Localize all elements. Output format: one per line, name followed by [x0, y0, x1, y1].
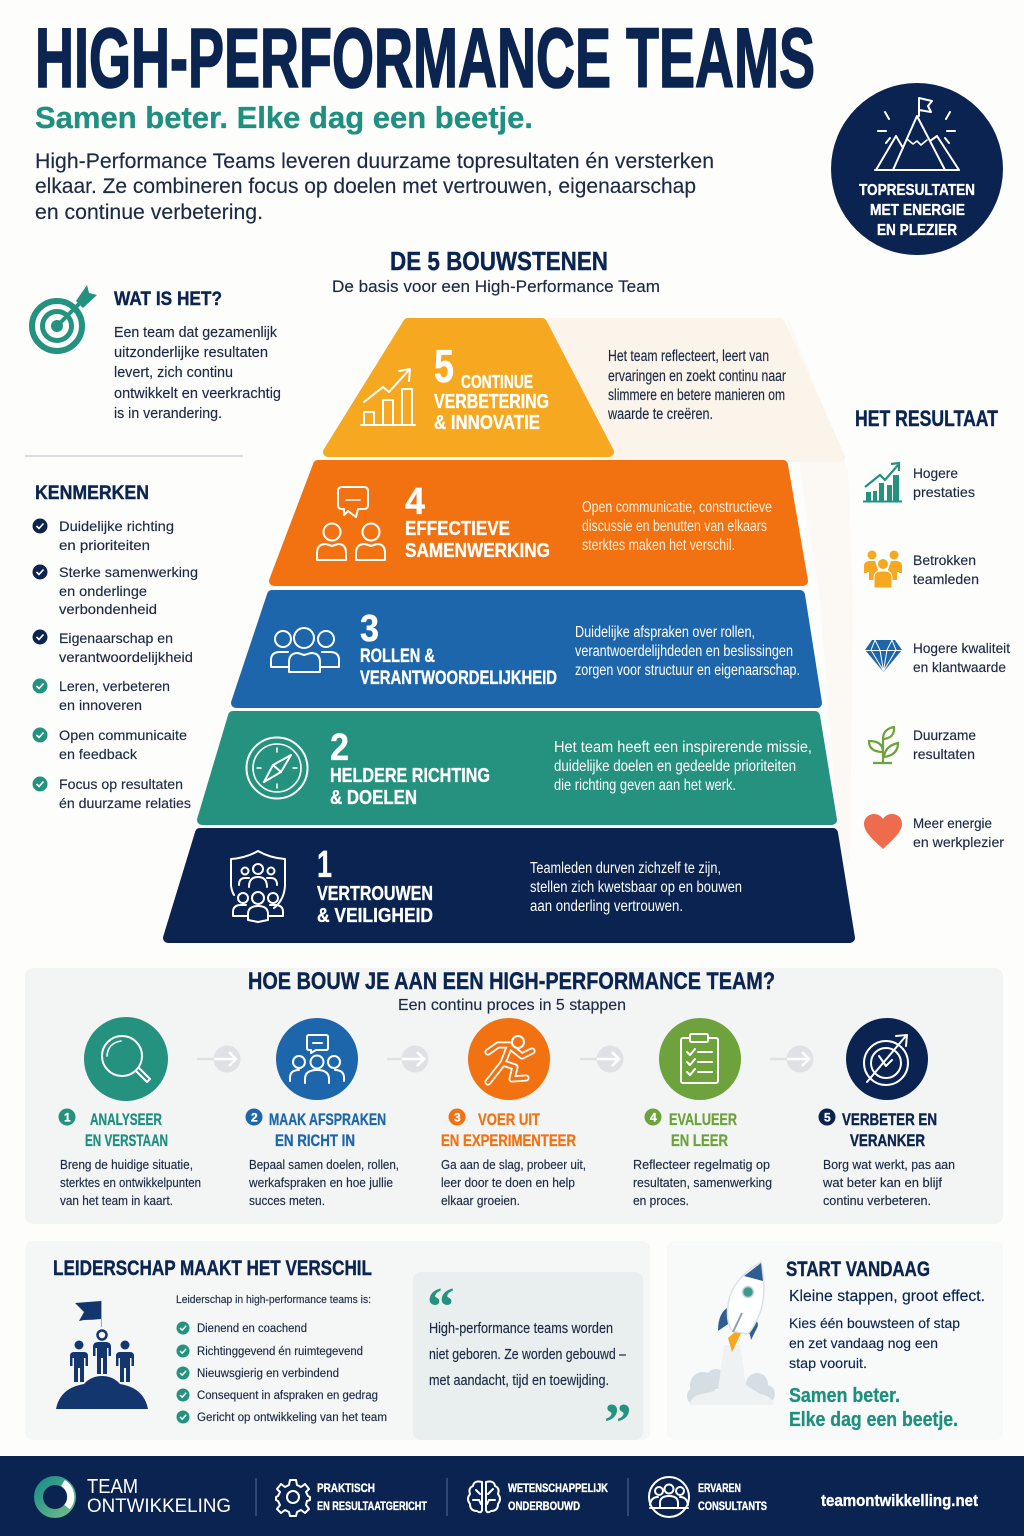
icon: rocket — [687, 1262, 775, 1405]
step 1: analyseer: van het team in kaart. — [60, 1194, 173, 1208]
icon: team of three — [271, 628, 339, 672]
panel: start vandaag: Kleine stappen, groot effect. — [789, 1288, 985, 1305]
panel: kenmerken: en onderlinge — [59, 583, 147, 599]
panel: het resultaat: resultaten — [913, 746, 975, 762]
icon: leader with team on hill — [56, 1301, 148, 1409]
icon: target — [32, 285, 97, 351]
panel: start vandaag: stap vooruit. — [789, 1355, 867, 1371]
panel: start vandaag — [667, 1241, 1003, 1440]
step 3: voer uit: 3 — [454, 1110, 461, 1124]
panel: het resultaat: Betrokken — [913, 552, 976, 568]
layer 1: vertrouwen en veiligheid: aan onderling vertrouwen. — [530, 898, 683, 915]
footer: ONDERBOUWD — [508, 1499, 580, 1513]
panel: kenmerken: en innoveren — [59, 697, 142, 713]
layer 1: vertrouwen en veiligheid — [168, 833, 850, 938]
panel: proces in 5 stappen — [25, 968, 1003, 1224]
icon: shield with team — [231, 851, 285, 922]
panel: het resultaat — [855, 406, 1010, 850]
icon: plant — [869, 727, 898, 763]
layer 5: continue verbetering: waarde te creëren. — [607, 406, 713, 423]
layer 4: effectieve samenwerking: discussie en benutten van elkaars — [582, 518, 767, 535]
panel: kenmerken: verbondenheid — [59, 601, 157, 617]
layer 3: rollen en verantwoordelijkheid: VERANTWOORDELIJKHEID — [360, 668, 557, 689]
intro text: elkaar. Ze combineren focus op doelen met vertrouwen, eigenaarschap — [35, 175, 696, 198]
step 5: verbeter en veranker: VERANKER — [850, 1131, 925, 1150]
layer 1: vertrouwen en veiligheid: VERTROUWEN — [317, 883, 433, 905]
panel: wat is het: WAT IS HET? — [114, 289, 222, 310]
step 4: evalueer: resultaten, samenwerking — [633, 1176, 772, 1190]
badge: topresultaten: TOPRESULTATEN — [859, 182, 975, 199]
panel: start vandaag: Samen beter. — [789, 1385, 900, 1407]
step 2: maak afspraken — [246, 1018, 399, 1208]
layer 3: rollen en verantwoordelijkheid: Duidelijke afspraken over rollen, — [575, 624, 755, 641]
quote box: niet geboren. Ze worden gebouwd – — [429, 1347, 627, 1363]
step 5: verbeter en veranker: 5 — [824, 1110, 831, 1124]
layer 5: continue verbetering: VERBETERING — [434, 391, 549, 413]
icon: brain — [468, 1482, 500, 1512]
layer 1: vertrouwen en veiligheid: & VEILIGHEID — [317, 905, 433, 927]
panel: leiderschap: Gericht op ontwikkeling van het team — [197, 1412, 387, 1424]
panel: wat is het: is in verandering. — [114, 406, 222, 422]
panel: het resultaat: prestaties — [913, 484, 975, 500]
layer 2: heldere richting: & DOELEN — [330, 787, 417, 809]
panel: wat is het: levert, zich continu — [114, 365, 233, 381]
intro text — [35, 150, 714, 224]
panel: het resultaat: Duurzame — [913, 727, 976, 743]
step 5: verbeter en veranker: VERBETER EN — [842, 1110, 937, 1129]
step 3: voer uit: EN EXPERIMENTEER — [441, 1131, 576, 1150]
intro text: High-Performance Teams leveren duurzame topresultaten én versterken — [35, 150, 714, 173]
layer 3: rollen en verantwoordelijkheid: zorgen voor structuur en eigenaarschap. — [575, 662, 800, 679]
step 4: evalueer: 4 — [650, 1110, 657, 1124]
panel: kenmerken: Sterke samenwerking — [59, 564, 198, 580]
step 1: analyseer: 1 — [64, 1110, 71, 1124]
layer 2: heldere richting: die richting geven aan het werk. — [554, 777, 736, 794]
panel: kenmerken: Focus op resultaten — [59, 776, 183, 792]
layer 4: effectieve samenwerking: sterktes maken het verschil. — [582, 537, 735, 554]
layer 2: heldere richting: 2 — [330, 727, 349, 769]
icon: compass — [246, 738, 308, 798]
layer 5: continue verbetering: ervaringen en zoekt continu naar — [608, 368, 786, 385]
layer 2: heldere richting — [202, 716, 832, 820]
panel: leiderschap: Dienend en coachend — [197, 1323, 307, 1335]
panel: kenmerken: verantwoordelijkheid — [59, 649, 193, 665]
panel: leiderschap: Nieuwsgierig en verbindend — [197, 1368, 339, 1380]
layer 5: continue verbetering: slimmere en betere manieren om — [608, 387, 785, 404]
layer 1: vertrouwen en veiligheid: Teamleden durven zichzelf te zijn, — [530, 860, 721, 877]
panel: kenmerken — [32, 483, 198, 811]
panel: het resultaat: en klantwaarde — [913, 659, 1006, 675]
quote box: met aandacht, tijd en toewijding. — [429, 1373, 609, 1389]
footer: CONSULTANTS — [698, 1499, 767, 1513]
panel: leiderschap — [25, 1241, 650, 1453]
intro text: en continue verbetering. — [35, 201, 263, 224]
step 2: maak afspraken: succes meten. — [249, 1194, 325, 1208]
layer 4: effectieve samenwerking: EFFECTIEVE — [405, 518, 510, 540]
panel: het resultaat: Hogere kwaliteit — [913, 640, 1010, 656]
layer 5: continue verbetering — [328, 323, 840, 457]
quote box: High-performance teams worden — [429, 1321, 613, 1337]
layer 2: heldere richting: HELDERE RICHTING — [330, 765, 490, 787]
subtitle: Samen beter. Elke dag een beetje. — [35, 100, 533, 135]
panel: proces in 5 stappen: HOE BOUW JE AAN EEN HIGH-PERFORMANCE TEAM? — [248, 968, 775, 995]
step 4: evalueer: Reflecteer regelmatig op — [633, 1158, 770, 1172]
icon: gear — [276, 1480, 310, 1516]
step 2: maak afspraken: 2 — [251, 1110, 258, 1124]
logo: team ontwikkeling: TEAM — [87, 1476, 138, 1498]
layer 5: continue verbetering: Het team reflecteert, leert van — [608, 348, 769, 365]
panel: kenmerken: Open communicaite — [59, 727, 187, 743]
quote box — [413, 1272, 643, 1453]
step 2: maak afspraken: werkafspraken en hoe jullie — [248, 1176, 393, 1190]
step 3: voer uit: Ga aan de slag, probeer uit, — [441, 1158, 586, 1172]
layer 5: continue verbetering: CONTINUE — [461, 372, 533, 392]
panel: wat is het: Een team dat gezamenlijk — [114, 325, 278, 341]
subheading: bouwstenen: De basis voor een High-Performance Team — [332, 277, 660, 296]
step 4: evalueer: EN LEER — [671, 1131, 728, 1150]
icon: mountain with flag — [875, 98, 959, 170]
step 3: voer uit: elkaar groeien. — [441, 1194, 520, 1208]
footer: ERVAREN — [698, 1481, 741, 1495]
arrows between steps — [197, 1046, 814, 1072]
panel: leiderschap: Leiderschap in high-performance teams is: — [176, 1294, 371, 1306]
icon: diamond — [865, 640, 902, 672]
step 1: analyseer — [58, 1017, 201, 1208]
step 3: voer uit — [441, 1018, 586, 1208]
step 5: verbeter en veranker: wat beter kan en blijf — [822, 1176, 943, 1190]
icon: magnifier — [102, 1036, 150, 1082]
panel: kenmerken: Eigenaarschap en — [59, 630, 173, 646]
footer — [0, 1456, 1024, 1536]
panel: kenmerken: Leren, verbeteren — [59, 678, 170, 694]
panel: leiderschap: Richtinggevend én ruimtegevend — [197, 1346, 363, 1358]
pyramid — [168, 318, 853, 938]
icon: consultants — [649, 1477, 689, 1517]
quote box: “ — [427, 1276, 454, 1337]
step 4: evalueer — [633, 1018, 772, 1208]
panel: start vandaag: Kies één bouwsteen of stap — [789, 1315, 960, 1331]
layer 1: vertrouwen en veiligheid: 1 — [317, 844, 332, 886]
badge: topresultaten: MET ENERGIE — [870, 202, 965, 219]
layer 5: continue verbetering: & INNOVATIE — [434, 412, 540, 434]
panel: leiderschap: LEIDERSCHAP MAAKT HET VERSCHIL — [53, 1257, 372, 1280]
layer 3: rollen en verantwoordelijkheid: verantwoerdelijhdeden en beslissingen — [575, 643, 793, 660]
icon: runner — [488, 1036, 532, 1082]
layer 4: effectieve samenwerking: Open communicatie, constructieve — [582, 499, 772, 516]
panel: het resultaat: Meer energie — [913, 815, 992, 831]
icon: heart — [864, 814, 902, 849]
heading: de 5 bouwstenen: DE 5 BOUWSTENEN — [390, 246, 608, 276]
layer 3: rollen en verantwoordelijkheid — [236, 595, 817, 703]
icon: target with arrow — [864, 1035, 908, 1085]
panel: wat is het: ontwikkelt en veerkrachtig — [114, 386, 281, 402]
panel: wat is het — [32, 285, 281, 422]
step 1: analyseer: Breng de huidige situatie, — [60, 1158, 193, 1172]
step 3: voer uit: VOER UIT — [478, 1110, 540, 1129]
layer 4: effectieve samenwerking: 4 — [405, 481, 425, 523]
layer 4: effectieve samenwerking — [274, 465, 803, 581]
step 3: voer uit: leer door te doen en help — [441, 1176, 575, 1190]
step 5: verbeter en veranker: Borg wat werkt, pas aan — [823, 1158, 955, 1172]
panel: start vandaag: Elke dag een beetje. — [789, 1409, 958, 1431]
step 5: verbeter en veranker: continu verbeteren. — [823, 1194, 931, 1208]
quote box: ” — [604, 1392, 632, 1453]
badge: topresultaten — [831, 83, 1003, 255]
panel: wat is het: uitzonderlijke resultaten — [114, 345, 268, 361]
step 5: verbeter en veranker — [818, 1018, 955, 1208]
layer 3: rollen en verantwoordelijkheid: 3 — [360, 608, 379, 650]
layer 2: heldere richting: Het team heeft een inspirerende missie, — [554, 739, 812, 756]
panel: het resultaat: teamleden — [913, 571, 979, 587]
website: teamontwikkelling.net — [821, 1491, 978, 1510]
panel: start vandaag: START VANDAAG — [786, 1258, 930, 1281]
logo: team ontwikkeling — [38, 1476, 231, 1517]
icon: engaged team — [864, 550, 902, 588]
footer: WETENSCHAPPELIJK — [508, 1481, 608, 1495]
layer 4: effectieve samenwerking: SAMENWERKING — [405, 540, 550, 562]
panel: kenmerken: én duurzame relaties — [59, 795, 191, 811]
layer 1: vertrouwen en veiligheid: stellen zich kwetsbaar op en bouwen — [530, 879, 742, 896]
icon: conversation — [317, 487, 385, 560]
step 4: evalueer: en proces. — [633, 1194, 689, 1208]
layer 5: continue verbetering: 5 — [434, 340, 454, 392]
layer 2: heldere richting: duidelijke doelen en gedeelde prioriteiten — [554, 758, 796, 775]
icon: meeting group — [290, 1035, 344, 1083]
step 2: maak afspraken: MAAK AFSPRAKEN — [269, 1110, 386, 1129]
footer: PRAKTISCH — [317, 1481, 375, 1495]
panel: het resultaat: Hogere — [913, 465, 958, 481]
layer 3: rollen en verantwoordelijkheid: ROLLEN & — [360, 646, 435, 667]
panel: kenmerken: en feedback — [59, 746, 138, 762]
badge: topresultaten: EN PLEZIER — [877, 222, 957, 239]
icon: growth chart — [361, 369, 415, 425]
step 1: analyseer: ANALYSEER — [90, 1110, 162, 1129]
step 1: analyseer: sterktes en ontwikkelpunten — [60, 1176, 201, 1190]
step 2: maak afspraken: Bepaal samen doelen, rollen, — [249, 1158, 399, 1172]
footer: EN RESULTAATGERICHT — [317, 1499, 428, 1513]
icon: checklist clipboard — [681, 1034, 718, 1083]
logo: team ontwikkeling: ONTWIKKELING — [87, 1496, 231, 1517]
panel: kenmerken: Duidelijke richting — [59, 518, 174, 534]
panel: kenmerken: KENMERKEN — [35, 483, 149, 504]
panel: start vandaag: en zet vandaag nog een — [789, 1335, 938, 1351]
panel: het resultaat: en werkplezier — [913, 834, 1004, 850]
panel: proces in 5 stappen: Een continu proces in 5 stappen — [398, 997, 626, 1014]
step 1: analyseer: EN VERSTAAN — [85, 1131, 168, 1150]
panel: leiderschap: Consequent in afspraken en gedrag — [197, 1390, 378, 1402]
panel: kenmerken: en prioriteiten — [59, 537, 150, 553]
icon: rising chart — [863, 463, 902, 502]
step 2: maak afspraken: EN RICHT IN — [275, 1131, 355, 1150]
step 4: evalueer: EVALUEER — [669, 1110, 737, 1129]
